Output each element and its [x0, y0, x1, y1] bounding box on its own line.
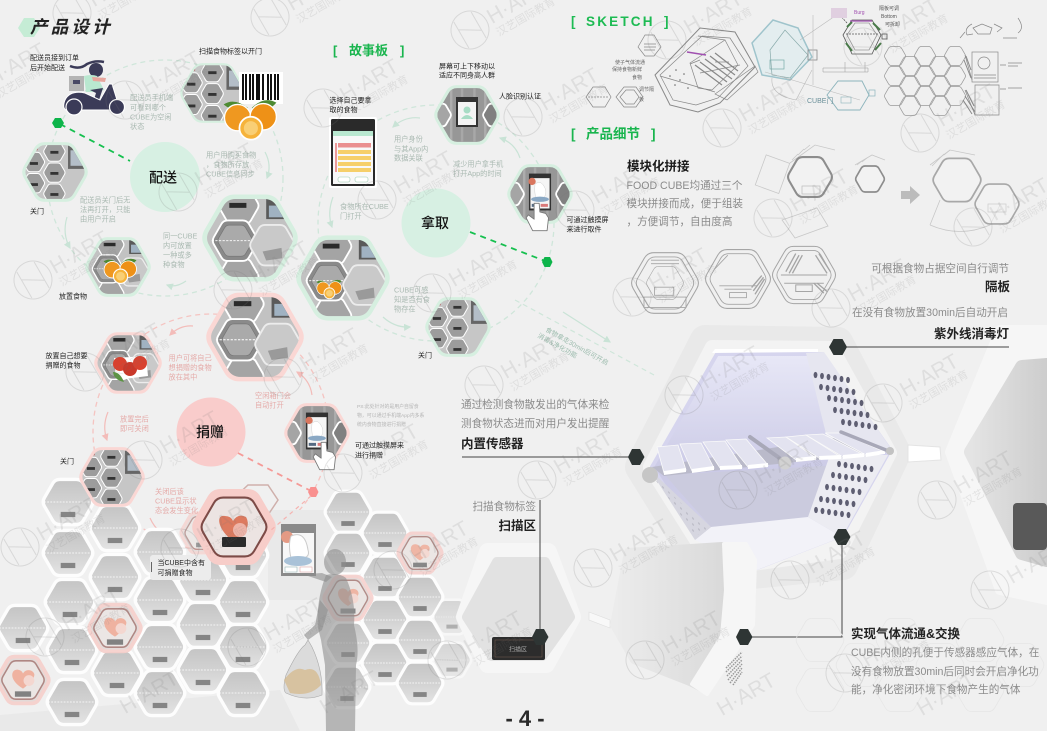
captions: donate: 关闭后该 — [155, 487, 184, 496]
captions: delivery: 内可放置 — [163, 241, 192, 250]
text: gas exchange: CUBE内侧的孔便于传感器感应气体，在 — [851, 646, 1039, 659]
text: scan area — [472, 500, 536, 533]
captions: pick up: 关门 — [418, 350, 432, 360]
watermark layer: H·ART — [536, 64, 603, 116]
sketch: CUBE structure: 使子气体流通 — [615, 59, 645, 66]
sketch: inner shelf and lamp: Bottom — [881, 14, 897, 20]
watermark layer: 汉艺国际教育 — [204, 512, 268, 557]
text: partition: 可根据食物占据空间自行调节 — [871, 262, 1009, 275]
watermark layer: 汉艺国际教育 — [691, 4, 755, 49]
watermark layer: 汉艺国际教育 — [307, 341, 371, 386]
captions: delivery: 由用户开启 — [80, 214, 116, 224]
text: partition: 隔板 — [985, 279, 1010, 294]
sketch: CUBE structure: 板 — [639, 96, 644, 103]
watermark layer: 汉艺国际教育 — [669, 624, 733, 669]
main cube: interior view — [640, 340, 941, 574]
watermark layer: H·ART — [950, 447, 1017, 499]
heading: 产品细节: [ — [571, 126, 576, 142]
captions: delivery: 种食物 — [163, 260, 185, 269]
highlighted donated cube — [194, 491, 274, 563]
watermark layer: 汉艺国际教育 — [797, 182, 861, 227]
caption card: 当CUBE中含有 — [150, 555, 211, 580]
hex: place donated food — [96, 327, 160, 403]
captions: donate: 放置完后 — [120, 414, 149, 424]
heading: SKETCH: SKETCH — [586, 14, 655, 29]
phone app panel: choose food — [329, 117, 377, 188]
text: scan area: 扫描食物标签 — [472, 500, 536, 513]
hex: touch screen, donate — [276, 402, 358, 470]
flow arrows: pink — [105, 326, 312, 540]
captions: pick up: 与其App内 — [394, 144, 428, 154]
kiosk screen on the wall — [281, 524, 316, 576]
watermark layer: 汉艺国际教育 — [44, 511, 108, 556]
watermark layer: 汉艺国际教育 — [599, 174, 663, 219]
flow arrows: green — [65, 118, 610, 342]
captions: pick up: 知是否有食 — [394, 295, 430, 304]
text: modular assembly: 模块拼接而成，便于组装 — [626, 197, 743, 210]
watermark layer: H·ART — [58, 584, 125, 636]
sketch: inner shelf and lamp: Burg — [854, 10, 865, 16]
watermark layer: H·ART — [844, 255, 911, 307]
captions: pick up: 适应不同身高人群 — [439, 70, 495, 80]
captions: delivery: 可看到哪个 — [130, 103, 166, 112]
callout line: sensor — [462, 449, 644, 465]
sketch: CUBE structure: 调节隔 — [639, 86, 654, 93]
sketch: honeycomb wall — [884, 18, 1022, 116]
watermark layer: H·ART — [803, 527, 870, 579]
watermark layer: H·ART — [390, 147, 457, 199]
watermark layer: H·ART — [406, 517, 473, 569]
title: 产品设计: 产品设计 — [30, 17, 113, 37]
watermark layer: 汉艺国际教育 — [69, 601, 133, 646]
captions: donate: 进行捐赠 — [355, 450, 383, 460]
hex: place food — [86, 232, 150, 306]
text: modular assembly: ，方便调节，自由度高 — [626, 215, 732, 228]
heading: SKETCH: ] — [664, 14, 671, 29]
captions: delivery: 配送员关门后无 — [80, 196, 130, 204]
scan area cube: 扫描区 — [509, 646, 527, 654]
watermark layer: H·ART — [191, 139, 258, 191]
captions: pick up: 屏幕可上下移动以 — [439, 62, 495, 70]
sketch: three wireframe cubes — [632, 246, 836, 313]
hex: open cube with food, pick up — [298, 229, 388, 333]
watermark layer: H·ART — [735, 75, 802, 127]
captions: delivery: CUBE为空闲 — [130, 112, 172, 122]
right side cube fragment — [950, 330, 1047, 600]
circle label: 拿取: 拿取 — [421, 215, 449, 231]
watermark layer: H·ART — [606, 515, 673, 567]
hex: closed door, pick up — [426, 296, 490, 358]
faint honeycomb at lower right — [796, 618, 1044, 712]
heading: 产品细节: ] — [651, 126, 656, 142]
captions: donate: 统内食物直接进行捐赠 — [357, 421, 406, 428]
sketch: CUBE structure: 保持食物新鲜 — [612, 66, 642, 73]
heading: 故事板: ] — [400, 43, 404, 58]
watermark layer: 汉艺国际教育 — [561, 444, 625, 489]
heading: 故事板: 故事板 — [349, 43, 388, 58]
watermark layer: H·ART — [316, 667, 383, 719]
dashed line from donate node to wall screen — [270, 496, 311, 531]
watermark layer: H·ART — [460, 607, 527, 659]
text: scan area: 扫描区 — [498, 518, 536, 533]
circle label: 配送: 配送 — [149, 170, 177, 186]
callout line: scan area — [532, 500, 548, 645]
watermark layer: 汉艺国际教育 — [708, 359, 772, 404]
watermark layer: H·ART — [713, 669, 780, 721]
watermark layer: 汉艺国际教育 — [202, 156, 266, 201]
captions: pick up: 食物所在CUBE — [340, 202, 389, 211]
captions: delivery: 状态 — [130, 122, 144, 131]
watermark layer: 汉艺国际教育 — [887, 11, 951, 56]
watermark layer: 汉艺国际教育 — [149, 64, 213, 109]
captions: pick up: 来进行取件 — [566, 224, 602, 234]
heading: 故事板: [ — [333, 43, 338, 58]
captions: delivery: 放置食物 — [59, 292, 87, 300]
sketch: inner shelf and lamp: 可拆卸 — [885, 21, 900, 28]
text: modular assembly: FOOD CUBE均通过三个 — [626, 179, 743, 192]
text: built-in sensor — [461, 398, 610, 451]
sketch: CUBE structure: 食物 — [632, 74, 642, 81]
watermark layer: 汉艺国际教育 — [617, 532, 681, 577]
watermark layer: H·ART — [445, 240, 512, 292]
captions: delivery: 配送员手机端 — [130, 93, 173, 102]
watermark layer: 汉艺国际教育 — [547, 81, 611, 126]
dashed ring: pick up — [318, 105, 554, 341]
heading: 产品细节: 产品细节 — [586, 126, 640, 142]
sketch: modular cubes — [755, 145, 1019, 238]
person with shopping bag — [284, 549, 358, 731]
text: partition — [852, 262, 1010, 341]
watermark layer: H·ART — [913, 669, 980, 721]
captions: delivery: 一种或多 — [163, 250, 192, 260]
dashed ring: donate — [93, 314, 329, 550]
scan area cube — [465, 552, 572, 664]
circle label: 配送 — [130, 142, 200, 212]
text: modular assembly: 模块化拼接 — [627, 158, 690, 174]
delivery rider icon — [64, 61, 124, 115]
text: modular assembly — [626, 158, 743, 228]
captions: donate: 放置自己想要 — [46, 351, 88, 360]
watermark layer: H·ART — [336, 55, 403, 107]
watermark layer: 汉艺国际教育 — [855, 272, 919, 317]
text: gas exchange — [851, 626, 1039, 696]
watermark layer: H·ART — [46, 227, 113, 279]
captions: pick up: 可通过触摸屏 — [566, 215, 608, 224]
page number: - 4 - — [505, 706, 545, 731]
watermark layer: 汉艺国际教育 — [869, 637, 933, 682]
rotated note: disinfection: 食物拿走30min后可开启 — [544, 325, 610, 367]
circle label: 拿取 — [402, 188, 470, 258]
watermark layer: 汉艺国际教育 — [271, 611, 335, 656]
captions: delivery: 法再打开，只能 — [80, 205, 130, 214]
watermark layer: H·ART — [933, 80, 1000, 132]
dashed link to the air system — [515, 300, 654, 375]
callout line: gas exchange — [736, 529, 850, 645]
watermark layer: 汉艺国际教育 — [257, 254, 321, 299]
icon: arrow between module sketches — [901, 186, 920, 204]
captions: donate: 态会发生变化 — [155, 506, 198, 515]
captions: delivery: 同一CUBE — [163, 232, 198, 240]
watermark layer: 汉艺国际教育 — [417, 534, 481, 579]
captions: pick up: 打开App的时间 — [453, 169, 502, 178]
captions: donate: 放在其中 — [168, 372, 197, 382]
captions: donate — [46, 351, 424, 515]
watermark layer: 汉艺国际教育 — [347, 72, 411, 117]
watermark layer: 汉艺国际教育 — [762, 454, 826, 499]
watermark layer: 汉艺国际教育 — [471, 624, 535, 669]
watermark layer: H·ART — [193, 495, 260, 547]
watermark layer: 汉艺国际教育 — [456, 257, 520, 302]
captions: donate: CUBE显示状 — [155, 496, 197, 506]
captions: donate: 捐赠的食物 — [46, 360, 80, 370]
captions: donate: 物，可以通过手机端App内多系 — [357, 412, 424, 419]
captions: pick up: 选择自己要拿 — [330, 96, 372, 104]
text: partition: 在没有食物放置30min后自动开启 — [852, 306, 1008, 319]
text: built-in sensor: 内置传感器 — [461, 436, 524, 451]
captions: delivery: 关门 — [30, 206, 44, 216]
captions: donate: 想捐赠的食物 — [168, 363, 212, 372]
captions: donate: 关门 — [60, 456, 74, 466]
watermark layer: 汉艺国际教育 — [167, 424, 231, 469]
captions: pick up: 人脸识别认证 — [499, 92, 541, 100]
watermark layer: H·ART — [246, 237, 313, 289]
captions: donate: 即可关闭 — [120, 424, 149, 433]
captions: delivery: 配送员接到订单 — [30, 53, 79, 62]
captions: donate: 可通过触摸屏来 — [355, 440, 404, 450]
text: built-in sensor: 测食物状态进而对用户发出提醒 — [461, 417, 610, 430]
captions: pick up: CUBE可感 — [394, 286, 428, 294]
captions: donate: PS:此处针对的是用户自留食 — [357, 403, 419, 410]
watermark layer: H·ART — [296, 324, 363, 376]
dashed ring: delivery — [47, 60, 283, 296]
watermark layer: H·ART — [33, 494, 100, 546]
watermark layer: H·ART — [658, 607, 725, 659]
text: built-in sensor: 通过检测食物散发出的气体来检 — [461, 398, 610, 411]
watermark layer: H·ART — [98, 319, 165, 371]
captions: delivery — [30, 46, 262, 300]
watermark layer: H·ART — [645, 244, 712, 296]
caption card: 当CUBE中含有: 当CUBE中含有 — [158, 558, 205, 567]
watermark layer: 汉艺国际教育 — [57, 244, 121, 289]
watermark layer: H·ART — [588, 157, 655, 209]
text: gas exchange: 没有食物放置30min后同时会开启净化功 — [851, 665, 1039, 678]
heading: SKETCH: [ — [571, 14, 578, 29]
watermark layer: 汉艺国际教育 — [907, 367, 971, 412]
watermark layer: 汉艺国际教育 — [401, 164, 465, 209]
watermark layer: H·ART — [896, 350, 963, 402]
captions: donate: 自动打开 — [255, 400, 284, 410]
hex: closed door, delivery — [23, 141, 87, 203]
rotated note: disinfection: 消毒&净化功能 — [536, 331, 579, 360]
watermark layer: H·ART — [751, 437, 818, 489]
watermark layer: 汉艺国际教育 — [814, 544, 878, 589]
captions: pick up: 减少用户拿手机 — [453, 160, 504, 168]
captions: delivery: ，食物所存放 — [206, 160, 249, 169]
callout line: UV lamp — [829, 339, 1009, 355]
captions: pick up — [330, 62, 608, 360]
honeycomb wall — [0, 479, 471, 731]
watermark layer: H·ART — [697, 342, 764, 394]
text: partition: 紫外线消毒灯 — [934, 326, 1009, 341]
hex: scan food label — [180, 61, 283, 140]
watermark layer: H·ART — [786, 165, 853, 217]
watermark layer: 汉艺国际教育 — [961, 464, 1025, 509]
watermark layer: H·ART — [116, 667, 183, 719]
captions: delivery: 后开始配送 — [30, 63, 65, 72]
watermark layer: 汉艺国际教育 — [109, 336, 173, 381]
sketch: CUBE structure — [586, 28, 758, 112]
watermark layer: 汉艺国际教育 — [944, 97, 1008, 142]
dashed pointer: donate — [238, 453, 318, 497]
captions: delivery: CUBE信息同步 — [206, 170, 255, 178]
hex: open cube, donate — [208, 286, 302, 395]
hex: closed door, donate — [80, 446, 144, 508]
circle label: 捐赠: 捐赠 — [196, 424, 224, 440]
watermark layer: 汉艺国际教育 — [746, 92, 810, 137]
captions: delivery: 用户用购买食物 — [206, 150, 256, 160]
dashed pointer: pick up — [470, 232, 552, 267]
watermark layer: H·ART — [260, 594, 327, 646]
hex: open cube, delivery — [204, 188, 296, 295]
watermark layer: H·ART — [858, 620, 925, 672]
captions: pick up: 用户身份 — [394, 134, 423, 144]
hex: face recognition — [426, 84, 508, 146]
captions: donate: 空闲箱门会 — [255, 391, 291, 400]
captions: pick up: 取的食物 — [330, 105, 358, 114]
detached cube door — [589, 544, 755, 694]
captions: pick up: 物存在 — [394, 304, 416, 314]
text: gas exchange: 实现气体流通&交换 — [851, 626, 961, 641]
watermark layer: H·ART — [356, 420, 423, 472]
sketch: inner shelf and lamp — [831, 5, 900, 54]
sketch: blue cube door — [752, 14, 875, 110]
captions: pick up: 门打开 — [340, 212, 362, 220]
dashed pointer: delivery — [52, 118, 130, 161]
caption card: 当CUBE中含有: 可捐赠食物 — [158, 568, 192, 577]
watermark layer: 汉艺国际教育 — [367, 437, 431, 482]
watermark layer: 汉艺国际教育 — [508, 349, 572, 394]
watermark layer: H·ART — [156, 407, 223, 459]
circle label: 捐赠 — [176, 398, 246, 466]
text: gas exchange: 能，净化密闭环境下食物产生的气体 — [851, 683, 1021, 696]
captions: donate: 用户可将自己 — [168, 354, 212, 362]
captions: delivery: 扫描食物标签以开门 — [199, 46, 262, 56]
sketch: blue cube door: CUBE门 — [807, 96, 833, 105]
watermark layer: H·ART — [138, 47, 205, 99]
captions: pick up: 数据关联 — [394, 154, 423, 162]
sketch: inner shelf and lamp: 隔板可调 — [879, 5, 899, 12]
watermark layer: H·ART — [550, 427, 617, 479]
watermark layer: H·ART — [497, 332, 564, 384]
watermark layer: 汉艺国际教育 — [656, 261, 720, 306]
hex: touch screen, pick up — [499, 163, 581, 231]
